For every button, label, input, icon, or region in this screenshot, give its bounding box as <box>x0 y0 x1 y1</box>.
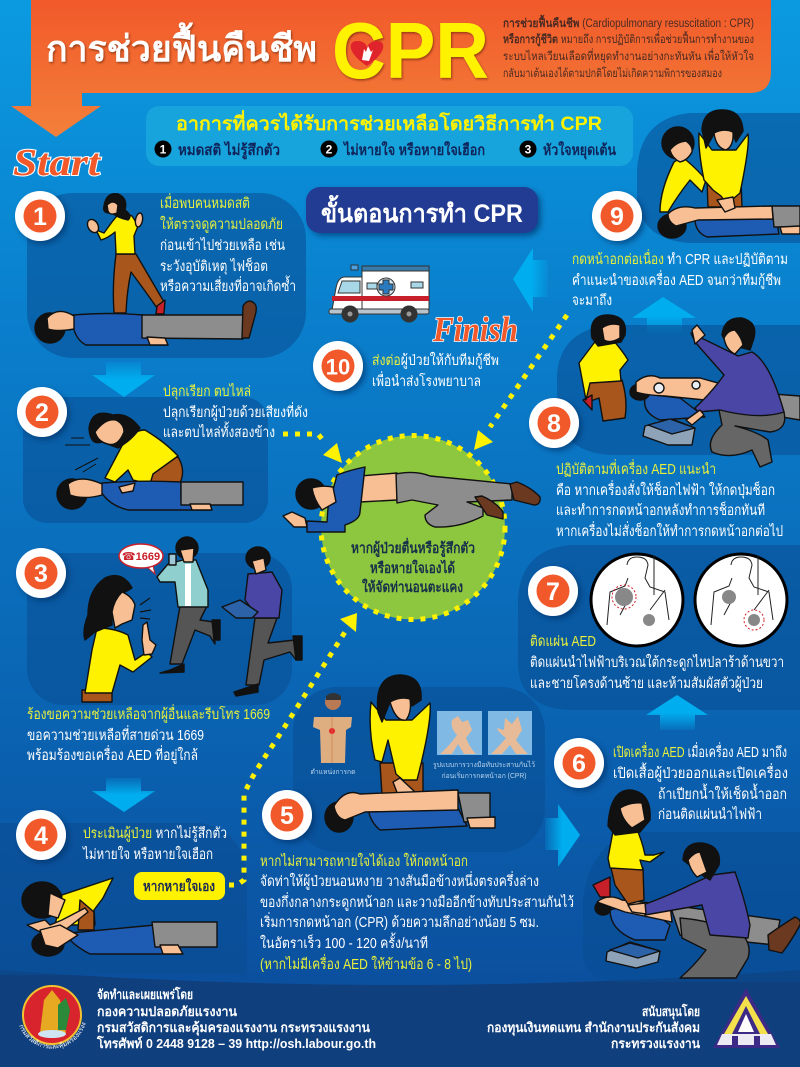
person lying unconscious <box>35 301 256 345</box>
symptom 2 <box>320 140 485 159</box>
credits: produced by <box>96 986 376 1051</box>
person in recovery position <box>283 467 540 532</box>
recovery instruction: ให้จัดท่านอนตะแคง <box>362 578 463 596</box>
step 9 text <box>572 249 788 309</box>
step 2 text <box>163 382 308 441</box>
person lying being shaken <box>57 479 243 510</box>
dotted path from step 4 to recovery <box>229 632 345 885</box>
step 5 text: หากไม่สามารถหายใจได้เอง ให้กดหน้าอก <box>260 852 468 870</box>
woman shaking shoulders <box>89 413 183 484</box>
step 3 badge <box>16 548 66 598</box>
logo: labour protection department <box>19 985 86 1049</box>
credits: produced by: จัดทำและเผยแพร่โดย <box>97 986 193 1002</box>
step 3 badge: 3 <box>34 560 48 588</box>
definition paragraph <box>503 14 754 80</box>
rescuer preparing AED <box>628 843 750 978</box>
arrow up 6 to 7 <box>646 695 708 730</box>
definition paragraph: การช่วยฟื้นคืนชีพ (Cardiopulmonary resuscitation : CPR) <box>503 14 754 30</box>
credits: supported by: กระทรวงแรงงาน <box>611 1036 700 1051</box>
step 6 badge: 6 <box>572 750 586 778</box>
panel: step 5 chest compressions <box>293 675 545 852</box>
callout: if breathing <box>134 872 225 900</box>
step 8 text: ปฏิบัติตามที่เครื่อง AED แนะนำ <box>556 459 716 478</box>
speech bubble 1669 <box>119 544 163 574</box>
arrow up 8 to 9 <box>632 297 696 333</box>
step 5 badge: 5 <box>280 802 294 830</box>
step 6 text <box>613 742 788 823</box>
step 1 text: เมื่อพบคนหมดสติ <box>160 193 250 212</box>
step 5 text: ของกึ่งกลางกระดูกหน้าอก และวางมืออีกข้างทับประสานกันไว้ <box>260 892 574 911</box>
credits: supported by: กองทุนเงินทดแทน สำนักงานประกันสังคม <box>487 1020 700 1036</box>
pad placement diagram left ribs <box>695 554 787 646</box>
step 1 text: ก่อนเข้าไปช่วยเหลือ เช่น <box>160 236 285 254</box>
step 1 text: หรือความเสี่ยงที่อาจเกิดซ้ำ <box>160 275 296 295</box>
step 10 text: เพื่อนำส่งโรงพยาบาล <box>372 371 481 390</box>
step 3 text <box>27 704 270 764</box>
recovery instruction <box>351 537 475 596</box>
start label: Start <box>13 142 102 184</box>
step 7 text <box>530 634 784 692</box>
credits: supported by: สนับสนุนโดย <box>642 1003 700 1020</box>
symptom 2: ไม่หายใจ หรือหายใจเฮือก <box>342 140 485 159</box>
arrowhead into recovery circle from 4 <box>340 613 357 632</box>
recovery instruction: หากผู้ป่วยตื่นหรือรู้สึกตัว <box>351 537 475 557</box>
definition paragraph: ระบบไหลเวียนเลือดที่หยุดทำงานอย่างกะทันหัน เพื่อให้หัวใจ <box>503 48 754 63</box>
rescuer doing compressions <box>699 110 748 207</box>
step 1 badge: 1 <box>33 203 47 231</box>
step 8 badge <box>529 398 579 448</box>
pad placement diagram right clavicle <box>591 554 683 646</box>
hand position diagrams: ก่อนเริ่มการกดหน้าอก (CPR) <box>442 771 526 780</box>
recovery instruction: หรือหายใจเองได้ <box>370 559 455 577</box>
heading: CPR steps <box>306 187 538 233</box>
step 1 badge <box>15 191 65 241</box>
step 5 badge <box>262 790 312 840</box>
arrow from 9 to ambulance <box>513 248 548 312</box>
symptom 2: 2 <box>326 142 333 156</box>
step 8 badge: 8 <box>547 410 561 438</box>
heading: CPR steps: ขั้นตอนการทำ CPR <box>321 194 523 228</box>
step 10 text <box>372 351 499 390</box>
header banner with start arrow <box>11 0 771 137</box>
step 9 badge <box>592 191 642 241</box>
step 1 text: ให้ตรวจดูความปลอดภัย <box>160 215 283 233</box>
woman shouting <box>82 576 156 702</box>
credits: produced by: กองความปลอดภัยแรงงาน <box>97 1004 237 1019</box>
step 1 text <box>160 193 296 295</box>
hand position diagrams: รูปแบบการวางมือทับประสานกันไว้ <box>433 760 535 769</box>
symptom 1: 1 <box>160 142 167 156</box>
symptom 3: หัวใจหยุดเต้น <box>543 141 617 160</box>
step 10 badge <box>313 341 363 391</box>
dotted path from step 9 to recovery <box>490 315 567 427</box>
rescuer kneeling behind <box>660 127 706 212</box>
step 3 text: พร้อมร้องขอเครื่อง AED ที่อยู่ใกล้ <box>27 745 198 764</box>
step 8 text <box>556 459 783 540</box>
panel: step 4 assess patient <box>0 823 247 975</box>
motion lines <box>65 438 98 472</box>
rescuer doing compressions <box>370 675 430 802</box>
symptom 1: หมดสติ ไม่รู้สึกตัว <box>178 140 280 160</box>
step 5 text: จัดท่าให้ผู้ป่วยนอนหงาย วางสันมือข้างหนึ่งตรงครึ่งล่าง <box>260 871 539 890</box>
step 4 badge: 4 <box>34 822 48 850</box>
credits: produced by: โทรศัพท์ 0 2448 9128 – 39 http://osh.labour.go.th <box>96 1035 376 1051</box>
arrow down 3 to 4 <box>92 778 155 812</box>
step 5 text: เริ่มการกดหน้าอก (CPR) ด้วยความลึกอย่างน้อย 5 ซม. <box>260 912 539 931</box>
compression point diagram: ตำแหน่งการกด <box>310 768 356 776</box>
step 7 badge: 7 <box>546 578 560 606</box>
symptoms heading: อาการที่ควรได้รับการช่วยเหลือโดยวิธีการทำ CPR <box>176 110 602 135</box>
step 4 text: ไม่หายใจ หรือหายใจเฮือก <box>82 845 213 863</box>
callout: if breathing: หากหายใจเอง <box>143 877 215 894</box>
definition paragraph: หรือการกู้ชีวิต หมายถึง การปฏิบัติการเพื่อช่วยฟื้นการทำงานของ <box>503 31 754 47</box>
symptom 3 <box>520 140 617 160</box>
arrowhead into recovery circle from 9 <box>474 430 493 450</box>
speech bubble 1669: ☎1669 <box>122 551 160 563</box>
panel: step 9 continue CPR <box>637 110 800 243</box>
step 3 text: ขอความช่วยเหลือที่สายด่วน 1669 <box>27 725 204 744</box>
symptom 3: 3 <box>525 142 532 156</box>
step 5 text: ในอัตราเร็ว 100 - 120 ครั้ง/นาที <box>260 932 428 952</box>
step 2 text: และตบไหล่ทั้งสองข้าง <box>163 421 275 441</box>
man carrying AED <box>222 547 302 696</box>
panel: step 7 attach AED pads <box>518 545 800 710</box>
CPR wordmark with heart: CPR <box>332 6 489 95</box>
logo: labour protection department: กรมสวัสดิการและคุ้มครองแรงงาน <box>19 1022 86 1049</box>
step 9 badge: 9 <box>610 203 624 231</box>
logo: social security office <box>713 988 780 1048</box>
person lying with head tilted <box>32 922 217 956</box>
patient lying <box>595 897 800 953</box>
compression point diagram <box>310 693 356 776</box>
step 7 text: ติดแผ่น AED <box>530 634 596 650</box>
step 4 text: ประเมินผู้ป่วย หากไม่รู้สึกตัว <box>83 824 227 842</box>
panel: step 6 turn on AED <box>583 790 800 982</box>
credits: produced by: กรมสวัสดิการและคุ้มครองแรงงาน กระทรวงแรงงาน <box>97 1020 370 1036</box>
step 4 badge <box>16 810 66 860</box>
arrow down 1 to 2 <box>92 362 155 397</box>
step 5 text <box>260 852 574 973</box>
recovery position circle <box>283 436 540 620</box>
panel: step 3 call for help <box>27 537 302 705</box>
step 6 text: ก่อนติดแผ่นนำไฟฟ้า <box>658 805 762 823</box>
woman walking <box>85 194 165 314</box>
step 4 text <box>82 824 227 863</box>
panel: step 2 wake the patient <box>23 397 268 523</box>
kneeling woman standing clear <box>579 315 628 421</box>
patient lying with pads <box>630 376 800 420</box>
arrow right 5 to 6 <box>545 804 580 867</box>
step 7 badge <box>528 566 578 616</box>
rescuer tilting head <box>22 878 113 934</box>
dotted path from step 2 to recovery <box>283 434 326 444</box>
step 1 text: ระวังอุบัติเหตุ ไฟช็อต <box>160 256 268 275</box>
step 2 badge <box>17 387 67 437</box>
step 6 badge <box>554 738 604 788</box>
footer band <box>0 970 800 1067</box>
arrowhead into recovery circle <box>323 443 342 463</box>
main title: การช่วยฟื้นคืนชีพ <box>46 22 317 69</box>
step 2 text: ปลุกเรียก ตบไหล่ <box>163 382 251 400</box>
panel: step 1 check safety <box>27 193 306 358</box>
symptom 1 <box>154 140 280 160</box>
woman instructing <box>593 790 664 904</box>
step 9 text: จะมาถึง <box>572 293 612 309</box>
man phoning <box>157 537 220 673</box>
ambulance <box>329 265 429 322</box>
panel: step 8 follow AED <box>557 315 800 467</box>
hand position diagrams <box>433 711 535 780</box>
AED machine <box>643 419 695 445</box>
step 10 text: ส่งต่อผู้ป่วยให้กับทีมกู้ชีพ <box>372 351 499 369</box>
definition paragraph: กลับมาเต้นเองได้ตามปกติโดยไม่เกิดความพิการของสมอง <box>503 66 722 80</box>
rescuer pressing shock button <box>686 318 785 467</box>
finish label: Finish <box>432 310 518 349</box>
person lying receiving CPR <box>658 197 800 238</box>
step 3 text: ร้องขอความช่วยเหลือจากผู้อื่นและรีบโทร 1669 <box>27 704 270 723</box>
person lying receiving compressions <box>325 790 495 832</box>
step 2 text: ปลุกเรียกผู้ป่วยด้วยเสียงที่ดัง <box>163 402 308 421</box>
step 2 badge: 2 <box>35 399 49 427</box>
step 10 badge: 10 <box>326 354 350 380</box>
AED machine <box>606 942 660 968</box>
step 5 text: (หากไม่มีเครื่อง AED ให้ข้ามข้อ 6 - 8 ไป) <box>260 954 472 973</box>
panel: symptoms needing CPR <box>146 106 633 166</box>
credits: supported by <box>487 1003 700 1051</box>
